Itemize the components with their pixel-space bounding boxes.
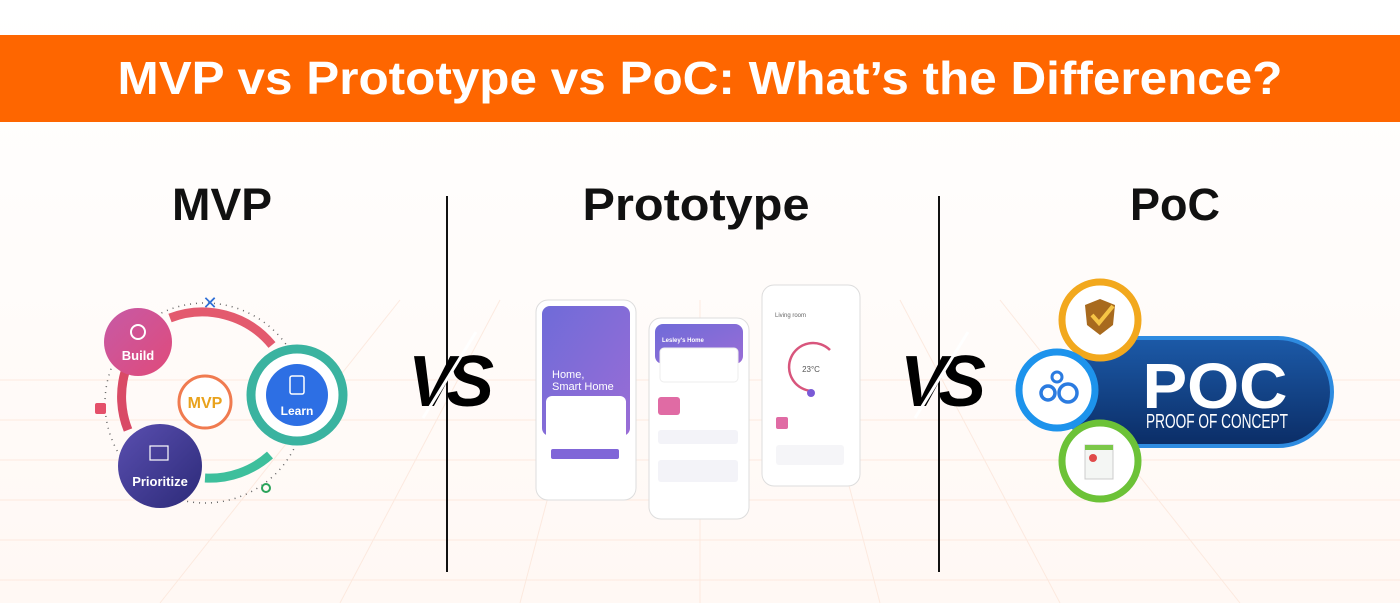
- PoC badge: [1019, 282, 1332, 499]
- node: Prioritize: [118, 424, 202, 508]
- heading: Prototype: Prototype: [582, 179, 810, 230]
- phone 3: Living room: [775, 313, 806, 319]
- title banner: MVP vs Prototype vs PoC: What’s the Difference?: [118, 52, 1282, 104]
- icon: satellite: ✕: [202, 293, 218, 313]
- icon: VS right: VS: [900, 342, 986, 422]
- phone 1: [536, 300, 636, 500]
- divider left: [446, 196, 448, 572]
- node: Learn: Learn: [281, 404, 313, 418]
- phone 2: [649, 318, 749, 519]
- icon: badge: [262, 484, 270, 492]
- node: MVP center: [179, 376, 231, 428]
- PoC badge: PROOF OF CONCEPT: [1146, 411, 1288, 433]
- divider right: [938, 196, 940, 572]
- node: Learn: [251, 349, 343, 441]
- phone 1: Smart Home: [552, 381, 614, 393]
- node: Prioritize: Prioritize: [132, 474, 188, 489]
- title banner: [0, 35, 1400, 122]
- phone 1: Home,: [552, 369, 584, 381]
- prototype phones: [536, 285, 860, 519]
- phone 3: [762, 285, 860, 486]
- node: Build: [104, 308, 172, 376]
- phone 2: Lesley's Home: [662, 338, 704, 344]
- MVP cycle diagram: [95, 293, 343, 508]
- icon: gears: [1019, 352, 1095, 428]
- icon: like: [95, 403, 106, 414]
- phone 3: 23°C: [802, 365, 820, 374]
- node: MVP center: MVP: [188, 395, 223, 412]
- icon: shield: [1062, 282, 1138, 358]
- heading: PoC: PoC: [1130, 179, 1220, 230]
- icon: VS left: VS: [408, 342, 494, 422]
- heading: MVP: MVP: [172, 179, 272, 230]
- PoC badge: POC: [1142, 350, 1288, 422]
- node: Build: Build: [122, 348, 154, 363]
- icon: report: [1062, 423, 1138, 499]
